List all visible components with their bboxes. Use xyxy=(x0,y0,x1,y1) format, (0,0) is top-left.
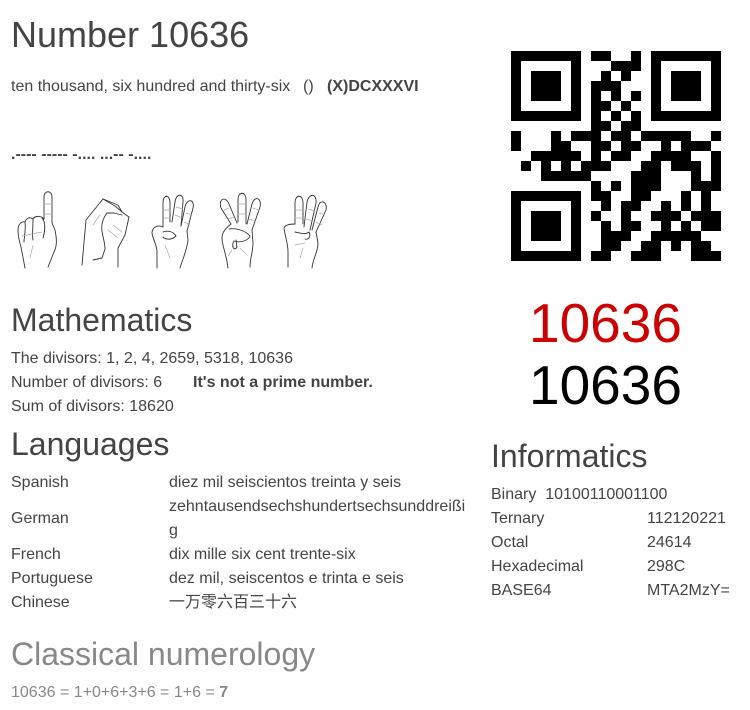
language table xyxy=(11,474,465,611)
icon: hand sign 1 xyxy=(18,192,56,268)
ternary value: 112120221 xyxy=(647,510,726,527)
big number red: 10636 xyxy=(529,292,682,354)
value: German: g xyxy=(169,522,178,539)
heading: languages: Languages xyxy=(11,426,169,462)
text: prime status: It's not a prime number. xyxy=(193,374,373,391)
row: binary: Binary 10100110001100 xyxy=(491,486,667,503)
row: German: German xyxy=(11,510,69,527)
icon: hand sign 6 xyxy=(152,195,193,268)
value: German xyxy=(169,498,465,539)
icon: hand sign 0 xyxy=(82,199,129,267)
sign language hands xyxy=(18,191,327,268)
row: Chinese: Chinese xyxy=(11,594,70,611)
octal value: 24614 xyxy=(647,534,692,551)
number in words: ten thousand, six hundred and thirty-six xyxy=(11,78,290,95)
row: French: French xyxy=(11,546,61,563)
icon: hand sign 3 alternate xyxy=(284,195,326,268)
heading: informatics: Informatics xyxy=(491,438,647,474)
big number black: 10636 xyxy=(529,354,682,416)
row: Portuguese: Portuguese xyxy=(11,570,93,587)
row: Spanish: Spanish xyxy=(11,474,69,491)
title: Number 10636 xyxy=(11,14,249,55)
value: Spanish: diez mil seiscientos treinta y seis xyxy=(169,474,401,491)
numerology formula: 10636 = 1+0+6+3+6 = 1+6 = 7 xyxy=(11,684,228,701)
value: Chinese: 一万零六百三十六 xyxy=(169,594,297,611)
value: German: zehntausendsechshundertsechsunddreißi xyxy=(169,498,465,515)
heading: classical numerology: Classical numerology xyxy=(11,636,315,672)
icon: hand sign 3 xyxy=(220,193,260,268)
heading: mathematics: Mathematics xyxy=(11,302,192,338)
row: hexadecimal label: Hexadecimal xyxy=(491,558,583,575)
value: French: dix mille six cent trente-six xyxy=(169,546,356,563)
roman numeral: (X)DCXXXVI xyxy=(327,78,419,95)
row: ternary label: Ternary xyxy=(491,510,544,527)
base64 value: MTA2MzY= xyxy=(647,582,730,599)
value: Portuguese: dez mil, seiscentos e trinta e seis xyxy=(169,570,404,587)
morse code: .---- ----- -.... ...-- -.... xyxy=(11,146,151,163)
text: sum of divisors: Sum of divisors: 18620 xyxy=(11,398,174,415)
row: base64 label: BASE64 xyxy=(491,582,551,599)
empty brackets: () xyxy=(303,78,314,95)
text: divisors: The divisors: 1, 2, 4, 2659, 5318, 10636 xyxy=(11,350,293,367)
hexadecimal value: 298C xyxy=(647,558,685,575)
informatics table xyxy=(491,486,730,599)
row: octal label: Octal xyxy=(491,534,528,551)
text: number of divisors: Number of divisors: 6 xyxy=(11,374,162,391)
QR code xyxy=(511,51,721,261)
